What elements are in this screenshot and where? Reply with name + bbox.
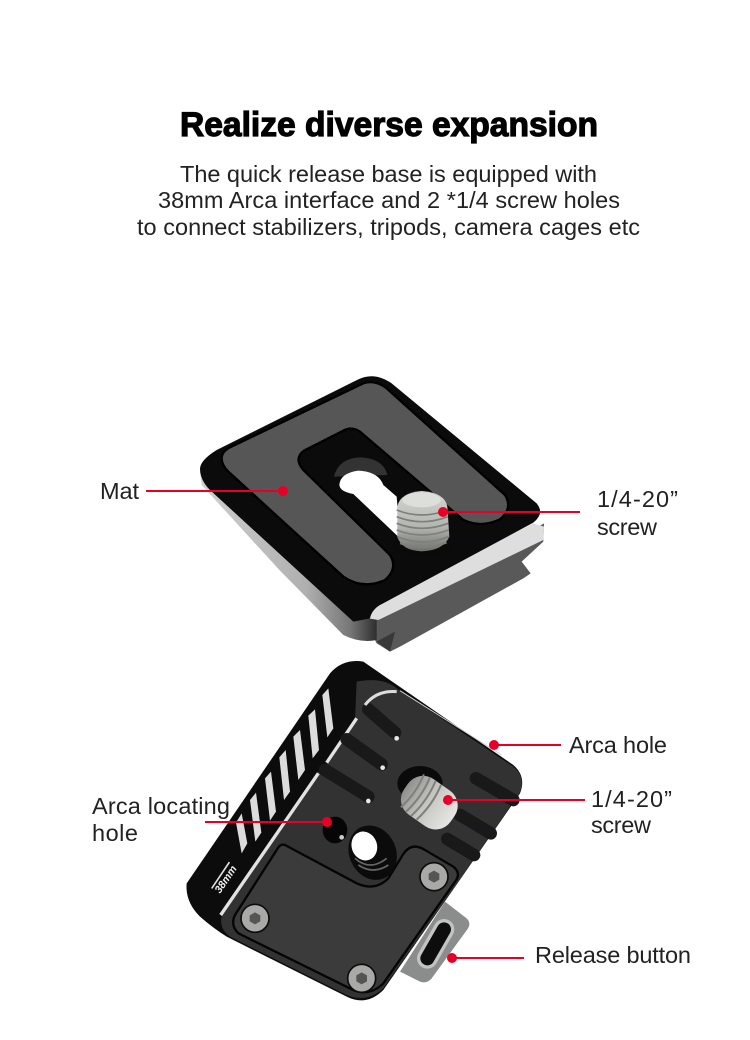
top edge highlight	[400, 691, 502, 755]
callout: Arca hole: Arca hole	[569, 732, 667, 758]
slot highlights	[366, 736, 399, 803]
white edge line	[221, 718, 357, 915]
release button	[400, 902, 469, 982]
callout: Arca locating hole: Arca locating	[92, 793, 230, 819]
threaded hole	[340, 817, 406, 888]
inner plate	[233, 845, 458, 992]
callout: top screw: screw	[597, 514, 658, 540]
product: quick release plate, top view	[200, 376, 544, 652]
description text	[137, 161, 640, 240]
rail slots	[325, 709, 513, 855]
description text: to connect stabilizers, tripods, camera cages etc	[137, 214, 640, 240]
threaded screw	[393, 491, 452, 556]
base face	[221, 680, 522, 998]
title: Realize diverse expansion	[180, 106, 598, 144]
callout: top screw	[438, 486, 678, 540]
callout: top screw: 1/4-20”	[597, 486, 678, 512]
callout: bottom screw: 1/4-20”	[591, 786, 672, 812]
hex screws	[241, 863, 448, 992]
plate top face	[200, 376, 540, 622]
keyhole slot	[339, 471, 400, 538]
base body	[186, 661, 522, 1000]
notch shadow	[377, 632, 395, 652]
left metal edge	[200, 472, 377, 641]
threaded screw	[394, 766, 465, 837]
front bright edge	[368, 523, 544, 620]
plate underside	[367, 523, 544, 652]
callout: Arca hole	[489, 732, 667, 758]
callout: Mat: Mat	[100, 478, 139, 504]
description text: The quick release base is equipped with	[180, 161, 597, 187]
description text: 38mm Arca interface and 2 *1/4 screw holes	[158, 187, 620, 213]
keyhole ring	[334, 457, 387, 477]
callout: Arca locating hole: hole	[92, 820, 138, 846]
callout: Mat	[100, 478, 288, 504]
rubber mat	[222, 382, 508, 584]
callout: bottom screw: screw	[591, 812, 652, 838]
38mm mark: 38mm	[213, 863, 240, 896]
product: quick release base, bottom view	[186, 661, 522, 1000]
callout: Release button	[447, 942, 691, 968]
callout: Release button: Release button	[535, 942, 691, 968]
callout: Arca locating hole	[92, 793, 332, 846]
locating hole	[323, 817, 347, 843]
callout: bottom screw	[443, 786, 672, 838]
diagonal stripes	[236, 688, 333, 853]
